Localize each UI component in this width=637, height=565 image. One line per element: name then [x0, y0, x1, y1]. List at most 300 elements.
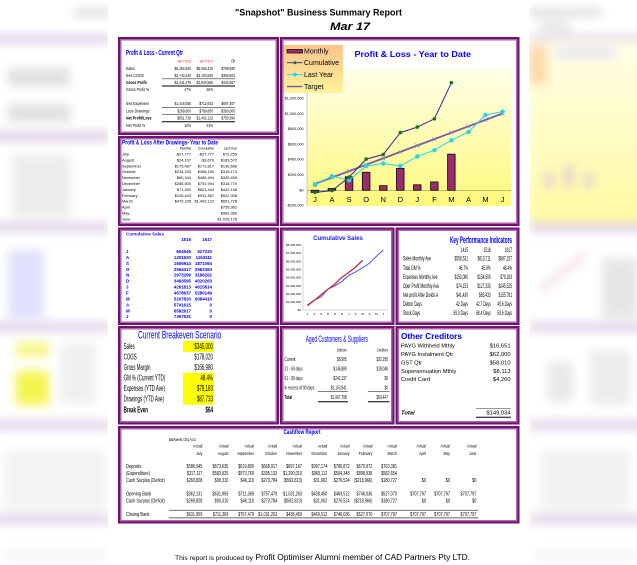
x axis month letters: F [432, 195, 437, 204]
row labels: Stock Days [403, 310, 421, 317]
chart heading: Profit & Loss - Year to Date [354, 49, 471, 59]
month labels: February [122, 193, 138, 198]
column: June: $707,797 [461, 511, 477, 517]
column: 1617: 1617 [505, 247, 512, 254]
column: last year: $349,459 [221, 175, 237, 180]
column: March: $180,727 [381, 498, 397, 504]
row values: $8,113 [493, 369, 511, 375]
column: March [381, 443, 397, 517]
column: February [354, 443, 373, 517]
row labels: Sales [126, 65, 136, 71]
x axis month letters: M [482, 195, 489, 204]
column: monthly: Monthly [180, 146, 191, 150]
column: August: $90,310 [215, 477, 229, 483]
row values: $178,020 [194, 353, 213, 362]
y axis labels: $5,000,000 [286, 268, 301, 272]
row labels: Debtor Days [403, 301, 422, 308]
column: 1617: $687,157 [499, 256, 512, 263]
y axis labels: $6,000,000 [286, 259, 301, 263]
column: January [334, 443, 350, 517]
column: August: $711,369 [213, 511, 229, 517]
column: Mar YTD 16: $2,441,379 [175, 79, 192, 85]
column: 1617: 48.4% [503, 265, 512, 272]
column: October: Actual [268, 443, 277, 449]
column: February: February [359, 450, 372, 456]
column: Mar YTD 16: $1,416,050 [175, 100, 192, 106]
column: 1415: 46.7% [459, 265, 468, 272]
column: November: $697,167 [286, 463, 302, 469]
y axis labels [286, 243, 301, 312]
row labels [126, 464, 165, 517]
row values [490, 344, 511, 383]
panel: cumulative sales chart [280, 228, 394, 325]
row labels: Sales [124, 343, 135, 351]
column: 1516: $154,500 [477, 274, 491, 281]
row values: $345,000 [194, 343, 213, 351]
month letters: N [126, 273, 129, 278]
month labels: June [122, 216, 130, 221]
row labels [126, 65, 152, 128]
month labels [122, 152, 142, 221]
month labels: September [122, 163, 142, 168]
x axis month letters: N [380, 195, 386, 204]
column: creditors: $0 [384, 375, 388, 381]
column: monthly: $285,500 [175, 181, 192, 186]
row values: $16,651 [490, 344, 511, 350]
heading: Profit & Loss After Drawings- Year to Date [122, 140, 219, 146]
column: Mar YTD 17: Mar YTD 17 [200, 59, 213, 64]
month letters: M [126, 308, 130, 313]
month letters: F [126, 290, 129, 296]
column: 1516 [174, 237, 192, 319]
column: Mar YTD 17: 48% [206, 86, 213, 92]
heading: Cumulative Sales [126, 232, 164, 236]
column: May: $707,797 [434, 511, 450, 517]
column: November: ($592,813) [284, 477, 302, 483]
column: 1516: 1516 [181, 237, 192, 242]
y axis labels: $1,000,000 [286, 300, 301, 304]
heading: Profit & Loss - Current Qtr [126, 50, 183, 57]
column: November: $438,450 [286, 511, 302, 517]
column: last year: Last Year [224, 146, 238, 150]
column: 1415: $41,430 [456, 292, 468, 299]
y axis labels: $8,000,000 [286, 243, 301, 247]
column: January: $276,524 [334, 498, 350, 504]
month labels: October [122, 169, 137, 174]
y axis labels: $1,200,000 [285, 96, 304, 100]
row labels: PAYG Withheld Mthly [401, 344, 455, 350]
column: monthly: $234,333 [175, 169, 191, 174]
y axis labels: $7,000,000 [286, 251, 301, 255]
month letters [126, 249, 130, 319]
total: Total [401, 411, 415, 417]
column: monthly: -$27,777 [176, 152, 191, 156]
column: June: June [469, 450, 477, 456]
column: 1415: 59.3 Days [453, 310, 468, 317]
column: 1617: 5280149 [195, 290, 213, 296]
column: July: $317,117 [187, 471, 203, 476]
heading: Key Performance Indicators [450, 235, 512, 246]
column: September [237, 443, 255, 517]
row values: $79,183 [197, 385, 213, 393]
row labels: Net Profit/Loss [126, 115, 152, 121]
row labels: Total [284, 394, 292, 400]
y axis labels: $4,000,000 [286, 276, 301, 280]
column: 1516: 5207820 [174, 296, 192, 302]
x axis letters: J [307, 312, 309, 316]
row labels: Closing Bank [126, 512, 150, 517]
column: last year: $759,362 [221, 205, 237, 210]
column: difference: $750,394 [221, 115, 235, 121]
column: August: $673,635 [213, 463, 229, 469]
row labels: Current [284, 356, 296, 362]
y axis labels: $400,000 [288, 158, 304, 162]
column: May: May [444, 450, 450, 456]
column: Mar YTD 17: $712,643 [199, 100, 213, 106]
column: debtors: $1,067,708 [331, 394, 347, 400]
column: cumulative: $931,887 [198, 193, 214, 198]
column: February: $746,036 [357, 491, 373, 497]
row labels [124, 343, 165, 415]
x axis letters: J [383, 312, 385, 316]
row labels: Deposits [126, 464, 142, 469]
row labels: Net Profit % [126, 122, 145, 128]
row labels [284, 356, 315, 400]
chart legend: Cumulative [304, 60, 339, 67]
column: March: Actual [388, 443, 397, 449]
chart heading: Cumulative Sales [313, 236, 364, 242]
column: Mar YTD 17: $2,934,565 [197, 79, 214, 85]
column: 1617: 0 [210, 302, 213, 307]
column: cumulative: $1,402,122 [195, 199, 214, 204]
y axis labels [285, 96, 304, 208]
column: August: $90,310 [215, 498, 229, 504]
column: 1516: 1201620 [174, 255, 192, 260]
column: difference: $799,590 [221, 65, 235, 71]
x axis month letters [313, 195, 505, 204]
column: Mar YTD 16: Mar YTD 16 [178, 59, 191, 64]
column: March: $527,070 [381, 491, 397, 497]
column: October [258, 443, 278, 517]
y axis labels: $800,000 [288, 127, 304, 131]
column: difference: $442,587 [221, 79, 235, 85]
column: April [410, 443, 426, 517]
x axis letters: N [334, 312, 336, 316]
x axis month letters: M [448, 195, 455, 204]
row labels: Sales Monthly Ave [403, 256, 431, 263]
column: August: $583,925 [213, 471, 229, 476]
column: December: $438,450 [311, 491, 328, 497]
row labels [401, 344, 456, 383]
column: 1617: 527220 [197, 249, 213, 254]
footer note [175, 553, 470, 562]
column: March: $707,797 [381, 511, 397, 517]
row labels: Gross Profit % [126, 86, 149, 92]
x axis month letters: D [398, 195, 404, 204]
line: 1617 sales [307, 260, 363, 306]
column: January: $469,512 [334, 491, 350, 497]
row labels: Gross Margin [124, 364, 151, 372]
line: 1516 sales [307, 250, 383, 305]
column: Mar YTD 17: $6,064,410 [197, 65, 214, 71]
x axis letters: A [368, 312, 371, 316]
column: March: March [388, 450, 397, 456]
column: 1516: 4261813 [174, 285, 192, 290]
bars: monthly [311, 154, 455, 192]
column: 1516: 5741615 [174, 302, 192, 307]
column: monthly: $470,235 [175, 199, 191, 204]
column: monthly: $175,487 [175, 163, 191, 168]
column: February: $527,070 [357, 511, 373, 517]
row labels: Credit Card [401, 377, 430, 383]
column: 1617 [195, 237, 213, 319]
column: debtors: $8,905 [337, 356, 347, 362]
column: September: Actual [245, 443, 254, 449]
y axis labels: $2,000,000 [286, 292, 301, 296]
column: 1617: 3188262 [195, 273, 213, 278]
column: 1617: $79,183 [500, 274, 512, 281]
column: 1516: 2564417 [174, 267, 192, 272]
column: August: August [218, 450, 229, 456]
month labels: April [122, 205, 130, 210]
panel: profit and loss after drawings [118, 136, 279, 226]
column: 1617: 1163111 [196, 255, 213, 260]
column: July: $586,945 [187, 463, 203, 469]
column: September: $46,110 [241, 498, 254, 504]
column: August [213, 443, 229, 517]
bank account label: Bankwest Chq Acct [169, 438, 196, 442]
row labels [403, 256, 439, 317]
column: December: $31,062 [313, 498, 328, 504]
column: 1617: 6084410 [195, 296, 213, 302]
column: difference [220, 59, 236, 121]
column: December [311, 443, 328, 517]
column: June: $707,797 [461, 491, 477, 497]
column: cumulative: $406,150 [198, 169, 215, 174]
column: April: $0 [422, 498, 426, 504]
column: November: November [286, 450, 303, 456]
column: 1516: 604546 [176, 249, 192, 254]
row labels: Opening Bank [126, 491, 152, 497]
column: monthly [175, 146, 192, 204]
column: 1516: $65,433 [479, 292, 491, 299]
row values: 48.4% [200, 374, 213, 383]
column: July: $362,131 [187, 491, 203, 497]
row values: $62,000 [490, 352, 511, 358]
heading: Aged Customers & Suppliers [306, 333, 368, 344]
line: cumulative [313, 81, 453, 194]
row labels: less COGS [126, 72, 144, 78]
column: Mar YTD 17: $789,800 [199, 108, 213, 114]
column: 1516: 1606914 [174, 261, 192, 266]
column: 1617: 4020263 [195, 279, 213, 284]
column: debtors: $1,153,941 [331, 384, 347, 391]
column: July: July [196, 450, 202, 456]
column: March: $180,727 [381, 477, 397, 483]
column: September: $573,760 [238, 471, 254, 476]
x axis letters: F [355, 312, 357, 316]
column: Mar YTD 16: 15% [184, 122, 191, 128]
column: June: $0 [472, 477, 477, 483]
heading: Cashflow Report [284, 430, 320, 436]
column: cumulative: Cumulative [198, 146, 214, 150]
x axis letters: M [361, 312, 364, 316]
column: September: September [237, 450, 255, 456]
row labels: 31 - 60 days [284, 366, 303, 372]
footer note: This report is produced by [175, 555, 254, 562]
column: January: $746,036 [334, 511, 350, 517]
x axis month letters: J [313, 195, 317, 204]
footer note: Profit Optimiser Alumni member of CAD Partners Pty LTD. [256, 553, 470, 562]
x axis month letters: J [501, 195, 505, 204]
x axis month letters: A [466, 195, 471, 204]
column: January: Actual [340, 443, 350, 449]
row labels: Drawings (YTD Ave) [124, 395, 164, 404]
y axis labels: -$200,000 [286, 204, 304, 208]
column: monthly: $24,107 [177, 157, 191, 162]
column: 1516: 6582917 [174, 308, 192, 313]
column: 1516: $613,711 [477, 256, 491, 263]
y axis labels: $0 [299, 188, 304, 192]
column: 1516: 45.9% [482, 265, 491, 272]
column: April: Actual [417, 443, 426, 449]
column: December: $965,112 [312, 471, 328, 476]
column: February: $898,938 [357, 471, 373, 476]
column: cumulative: -$27,777 [199, 152, 214, 156]
column: creditors: $18,046 [376, 366, 388, 372]
chart legend: Target [304, 84, 324, 91]
column: creditors: $0 [384, 384, 388, 391]
month letters: A [126, 302, 130, 307]
column: December: $997,174 [311, 463, 328, 469]
month labels: November [122, 175, 141, 180]
column: Mar YTD 17: 23% [206, 122, 213, 128]
panel: cumulative sales table [118, 228, 279, 325]
panel: cashflow report [118, 426, 520, 524]
column: difference: $697,407 [221, 100, 235, 106]
row labels: GST Qtr [401, 360, 422, 366]
column: last year: $651,728 [221, 199, 237, 204]
row labels: (Expenditure) [126, 471, 150, 476]
column: 1516: $127,333 [477, 283, 491, 290]
row values [194, 343, 213, 415]
month labels: May [122, 210, 129, 216]
column: September: $757,479 [238, 511, 254, 517]
row labels: COGS [124, 353, 137, 362]
column: 1415: $558,531 [455, 256, 468, 263]
row labels: GM % (Current YTD) [124, 374, 165, 383]
column: debtors: Debtors [337, 347, 347, 353]
column: 1516: 68.4 Days [476, 310, 491, 317]
line: target [313, 112, 505, 186]
column: 1617: 59.6 Days [497, 310, 512, 317]
column: 1617: 4615814 [195, 285, 213, 290]
column: 1617: 45.6 Days [497, 301, 512, 308]
column: difference: $358,603 [221, 72, 235, 78]
panel: profit and loss year to date chart [280, 37, 520, 226]
row values: $4,260 [493, 377, 511, 383]
heading: Other Creditors [401, 331, 462, 341]
row labels: Expenses (YTD Ave) [124, 385, 165, 393]
column: last year: $316,174 [221, 169, 238, 174]
column: 1617: $155,791 [499, 292, 512, 299]
panel: aged customers and suppliers [280, 326, 394, 424]
column: December: $31,062 [313, 477, 328, 483]
column: July: Actual [193, 443, 202, 449]
column: 1617 [497, 247, 512, 317]
column: last year [218, 146, 238, 221]
column: Mar YTD 16: $2,743,440 [175, 72, 192, 78]
column: cumulative: $751,994 [198, 181, 215, 186]
column: February: ($218,966) [354, 477, 373, 483]
month letters: S [126, 261, 129, 266]
row values: $87,733 [197, 395, 213, 404]
y axis labels: $1,000,000 [285, 112, 304, 116]
month letters: J [126, 285, 129, 290]
column: 1415: $74,153 [456, 283, 468, 290]
column: February: ($218,966) [354, 498, 373, 504]
column: May [434, 443, 450, 517]
column: 1415 [453, 247, 468, 317]
y axis labels: $600,000 [288, 142, 304, 146]
yellow highlights [183, 341, 214, 405]
column: cumulative: -$3,670 [201, 157, 215, 162]
row labels: In excess of 90 days [284, 384, 315, 391]
column: February: Actual [363, 443, 372, 449]
column: 1617: 1871094 [195, 261, 213, 266]
column: May: $0 [446, 498, 450, 504]
row labels: Less Drawings [126, 108, 150, 114]
column: Mar YTD 16: $269,600 [177, 108, 191, 114]
y axis labels: $200,000 [288, 173, 304, 177]
zero axis [307, 189, 511, 191]
panel: key performance indicators [396, 228, 520, 325]
column: last year: $1,025,178 [218, 216, 237, 221]
y axis labels: $3,000,000 [286, 284, 301, 288]
column: debtors [331, 347, 347, 400]
column: last year: $183,572 [221, 157, 237, 162]
heading: Current Breakeven Scenario [138, 329, 221, 341]
column: April: $707,797 [410, 511, 426, 517]
row labels: Net profit After Divids A [403, 292, 439, 299]
month labels: March [122, 199, 133, 204]
column: October: $273,784 [261, 498, 278, 504]
total: $149,034 [486, 411, 511, 417]
column: January: $780,872 [334, 463, 350, 469]
column: September: $619,800 [238, 463, 254, 469]
column: difference: Dif [231, 59, 236, 64]
plot background [307, 68, 511, 206]
row labels: Cash Surplus (Deficit) [126, 478, 165, 483]
line: last year [313, 109, 505, 187]
column: September: $46,110 [241, 477, 254, 483]
column: July: $631,959 [187, 511, 203, 517]
column: creditors [376, 347, 388, 400]
column: August: Actual [219, 443, 228, 449]
column: cumulative [195, 146, 215, 204]
column: last year: $130,686 [221, 163, 237, 168]
column: December: Actual [318, 443, 327, 449]
row labels: Oper Profit Monthly Ave [403, 283, 439, 290]
month letters: A [126, 255, 130, 260]
column: January: $276,524 [334, 477, 350, 483]
column: 1516: 42.7 Days [476, 301, 491, 308]
column: last year: $522,308 [221, 193, 237, 198]
column: Mar YTD 17: $1,402,122 [197, 115, 214, 121]
x axis letters: D [341, 312, 344, 316]
column: Mar YTD 16: $5,264,820 [175, 65, 192, 71]
column: April: $0 [422, 477, 426, 483]
